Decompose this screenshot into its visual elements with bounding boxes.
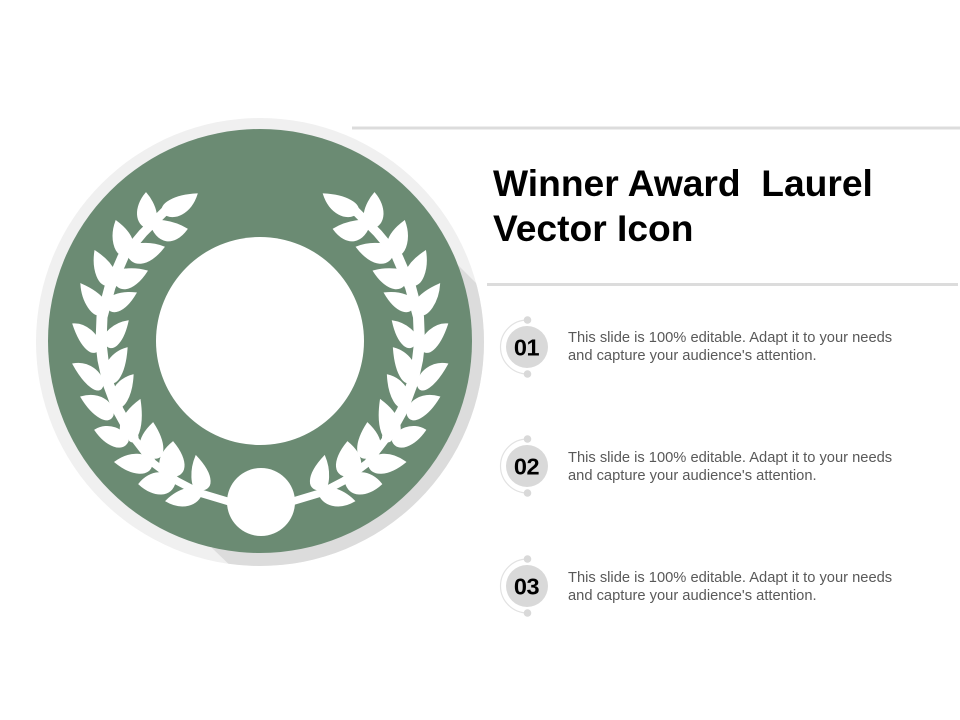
- outer halo ring: [36, 118, 484, 566]
- center white circle: [156, 237, 364, 445]
- wreath bottom medal circle: [227, 468, 295, 536]
- text 02: This slide is 100% editable. Adapt it to your needs: [568, 450, 892, 466]
- list item 01: [500, 316, 892, 378]
- title: Winner Award Laurel: [493, 162, 873, 204]
- text 01: and capture your audience's attention.: [568, 348, 817, 364]
- award medallion: [36, 118, 484, 566]
- badge 01: [500, 316, 548, 378]
- laurel wreath icon: [73, 193, 448, 536]
- list item 03: [500, 555, 892, 617]
- text 01: [568, 330, 892, 364]
- text 03: and capture your audience's attention.: [568, 588, 817, 604]
- badge 02: [500, 435, 548, 497]
- badge 03: [500, 555, 548, 617]
- title: Vector Icon: [493, 207, 693, 249]
- badge 02: 02: [514, 454, 539, 480]
- text 02: and capture your audience's attention.: [568, 468, 817, 484]
- text 03: This slide is 100% editable. Adapt it to your needs: [568, 570, 892, 586]
- halo shadow: [212, 265, 484, 566]
- green disc: [48, 129, 472, 553]
- text 03: [568, 570, 892, 604]
- left laurel branch: [73, 193, 230, 506]
- text 02: [568, 450, 892, 484]
- right laurel branch: [290, 193, 448, 506]
- title: [493, 162, 873, 249]
- list item 02: [500, 435, 892, 497]
- badge 03: 03: [514, 574, 539, 600]
- badge 01: 01: [514, 334, 539, 360]
- text 01: This slide is 100% editable. Adapt it to your needs: [568, 330, 892, 346]
